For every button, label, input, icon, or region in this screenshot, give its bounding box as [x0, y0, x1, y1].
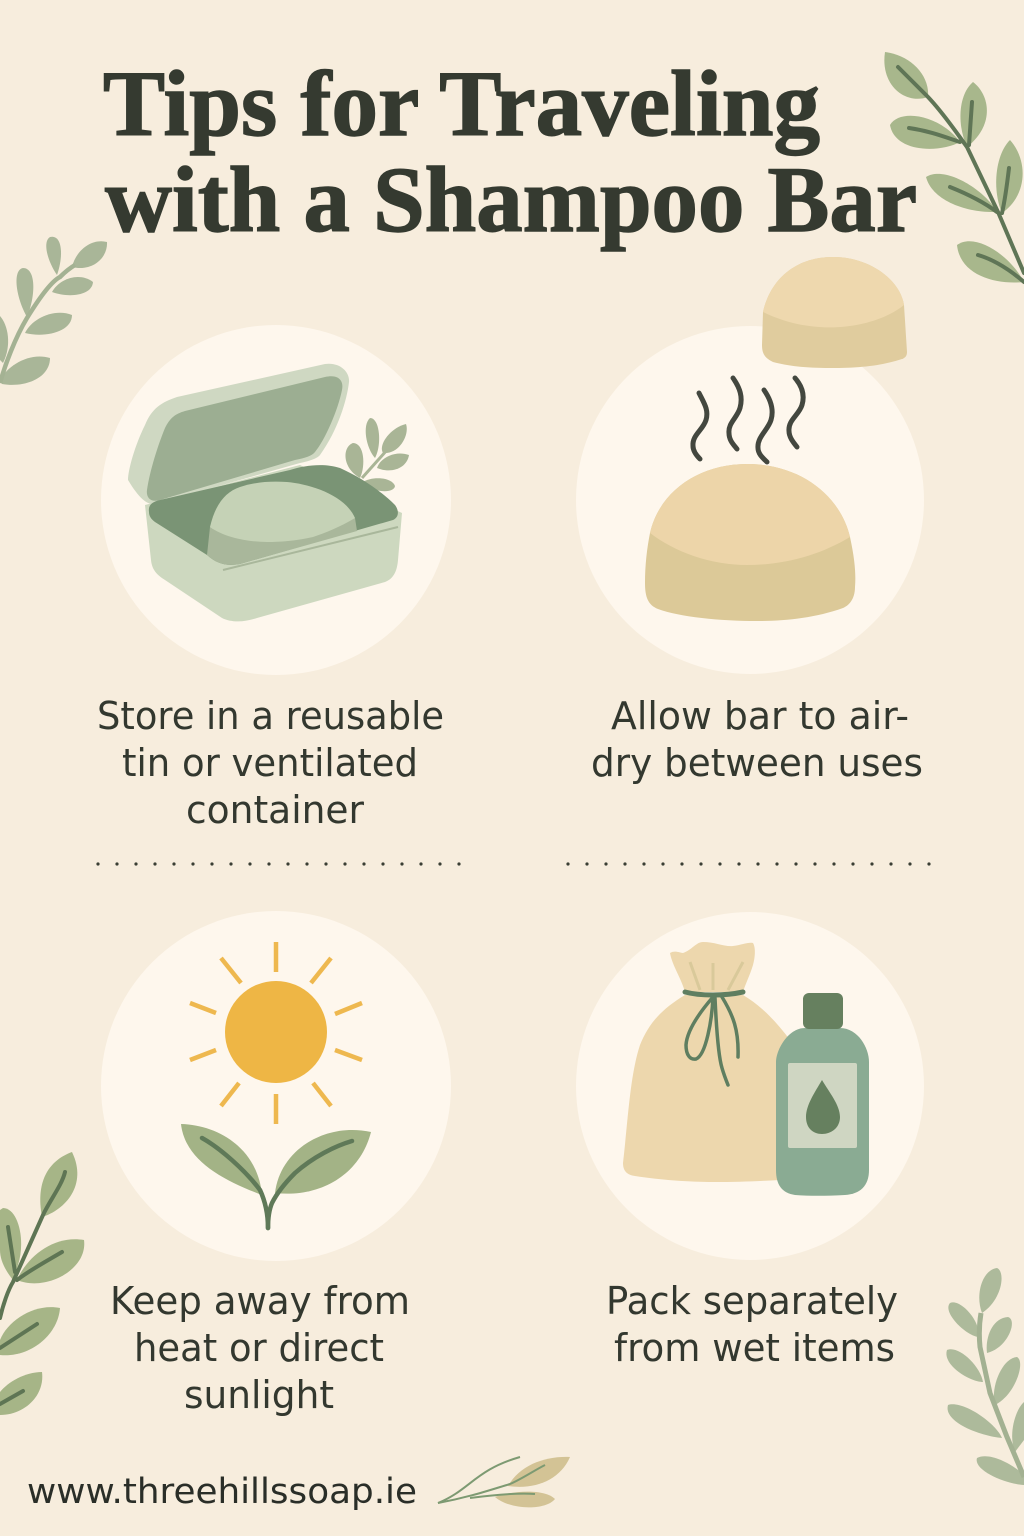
title	[103, 53, 917, 252]
text: tip 4	[606, 1279, 898, 1370]
icon: bottle	[776, 993, 869, 1196]
text: tip 2: dry between uses	[591, 741, 923, 785]
text: tip 3: Keep away from	[110, 1279, 410, 1323]
footer website: www.threehillssoap.ie	[27, 1472, 417, 1512]
tip 3: avoid heat	[101, 911, 451, 1417]
text: tip 3: heat or direct	[134, 1326, 384, 1370]
title: with a Shampoo Bar	[105, 149, 917, 252]
branch: bottom right	[946, 1268, 1024, 1485]
branch: top left	[0, 237, 107, 385]
icon: upper soap bar	[762, 257, 907, 368]
icon: sprout	[181, 1124, 371, 1228]
text: tip 2	[591, 694, 923, 785]
text: tip 3	[110, 1279, 410, 1417]
tip 4: pack separately	[576, 912, 924, 1370]
tip 1: reusable tin	[97, 325, 451, 832]
branch: bottom left	[0, 1152, 84, 1415]
tip 2: air-dry	[576, 257, 924, 785]
text: tip 1: container	[186, 788, 364, 832]
text: tip 4: Pack separately	[606, 1279, 898, 1323]
background circle 1	[101, 325, 451, 675]
icon: lower soap bar	[645, 464, 855, 621]
text: tip 2: Allow bar to air-	[611, 694, 909, 738]
text: tip 1: Store in a reusable	[97, 694, 444, 738]
title: Tips for Traveling	[103, 53, 820, 156]
icon: footer twig	[438, 1457, 570, 1507]
background circle 3	[101, 911, 451, 1261]
background circle 4	[576, 912, 924, 1260]
icon: steam lines	[693, 378, 803, 462]
icon: sun	[190, 942, 362, 1124]
text: tip 1	[97, 694, 444, 832]
icon: drawstring bag	[623, 942, 790, 1182]
branch: top right	[884, 52, 1024, 283]
text: tip 3: sunlight	[184, 1373, 334, 1417]
background circle 2	[576, 326, 924, 674]
icon: open tin with soap bar	[128, 364, 409, 621]
text: tip 4: from wet items	[614, 1326, 895, 1370]
text: tip 1: tin or ventilated	[122, 741, 418, 785]
